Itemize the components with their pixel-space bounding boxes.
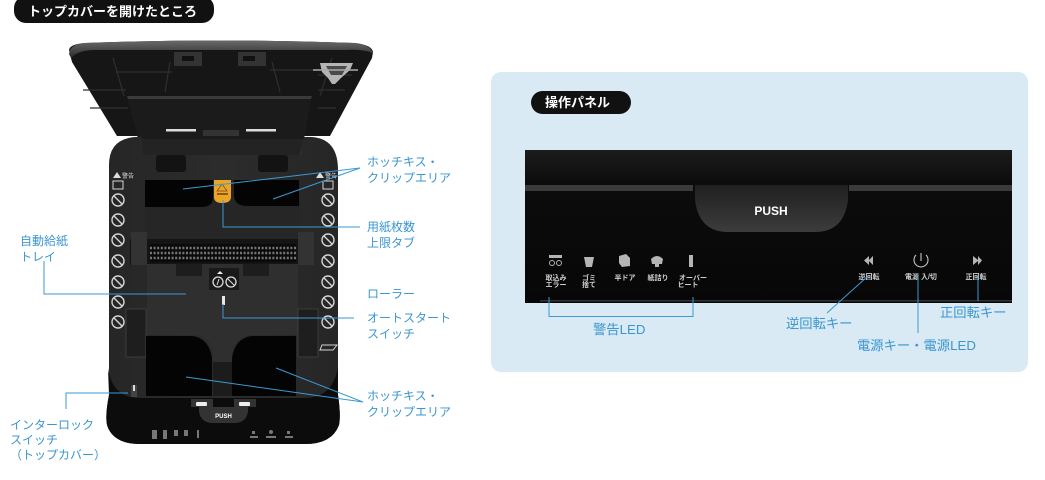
label: staple clip area top: ホッチキス・ [367, 155, 439, 169]
auto feed tray [147, 264, 298, 362]
warning LED captions [546, 273, 707, 289]
icon: feed error [549, 255, 562, 266]
small front panel icons [152, 430, 293, 439]
heading pill: top cover open [14, 0, 214, 23]
warning stickers left [112, 181, 124, 328]
label: staple clip area bottom: クリップエリア [367, 405, 451, 419]
forward key: 正回転 [966, 272, 986, 281]
warning LED captions: 紙詰り [648, 273, 668, 282]
warning triangles [113, 172, 337, 180]
label: power key and LED: 電源キー・電源LED [857, 338, 976, 353]
label: paper limit tab: 上限タブ [367, 235, 415, 250]
label: auto start switch: オートスタート [367, 311, 451, 325]
label: interlock switch: インターロック [10, 418, 94, 432]
heading pill: control panel [531, 91, 631, 114]
heading pill: top cover open: トップカバーを開けたところ [28, 4, 197, 19]
side brackets [126, 309, 318, 357]
power key [905, 253, 937, 281]
panel: control panel [491, 72, 1028, 372]
warning LED captions: 取込み [546, 274, 566, 282]
icon: paper jam [651, 256, 663, 267]
push tab small: PUSH [215, 414, 232, 420]
latches [191, 399, 256, 407]
label: staple clip area top: クリップエリア [367, 171, 451, 185]
warning triangles: 警告 [325, 172, 337, 180]
reverse key: 逆回転 [858, 272, 880, 281]
power key: 電源 入/切 [905, 272, 937, 281]
icon: bin [584, 257, 594, 267]
warning LED icons [549, 254, 693, 267]
icon: door [619, 254, 630, 267]
label: warning LED: 警告LED [593, 322, 645, 337]
push tab small [199, 407, 248, 423]
warning LED captions: オーバー [679, 274, 707, 282]
label: auto feed tray: トレイ [20, 250, 56, 264]
label: interlock switch: （トップカバー） [10, 448, 106, 462]
push tab: PUSH [754, 204, 788, 218]
top cover lid [69, 40, 373, 155]
icon: overheat [689, 255, 693, 267]
lower compartments [146, 336, 296, 396]
roller [130, 232, 314, 265]
paper limit tab [214, 180, 231, 203]
warning LED captions: 捨て [582, 280, 596, 289]
label: staple clip area bottom: ホッチキス・ [367, 389, 439, 403]
label: interlock switch: スイッチ [10, 433, 58, 447]
warning LED captions: ゴミ [582, 273, 596, 282]
label: reverse key: 逆回転キー [786, 316, 852, 331]
callout leader lines: left photo [44, 168, 363, 409]
upper compartments [145, 180, 300, 255]
front base curve [106, 368, 340, 444]
label: paper limit tab: 用紙枚数 [367, 219, 415, 234]
warning triangles: 警告 [122, 172, 134, 180]
control panel photo [525, 150, 1012, 303]
callout leader lines: control panel [549, 276, 978, 333]
main body [106, 137, 340, 444]
warning LED captions: 半ドア [614, 273, 636, 282]
warning stickers right [320, 181, 337, 350]
label: auto start switch: スイッチ [367, 327, 415, 341]
label: forward key: 正回転キー [940, 305, 1006, 320]
reverse key [858, 256, 880, 281]
label: roller: ローラー [367, 287, 415, 301]
heading pill: control panel: 操作パネル [545, 95, 610, 110]
interlock switch [131, 385, 137, 397]
shredder photo: top cover open [69, 40, 373, 444]
warning LED captions: ヒート [678, 281, 698, 289]
push tab [695, 185, 848, 232]
warning LED captions: エラー [546, 281, 566, 289]
label: auto feed tray: 自動給紙 [20, 234, 68, 248]
forward key [966, 256, 986, 281]
auto start icons and switch [209, 268, 239, 305]
